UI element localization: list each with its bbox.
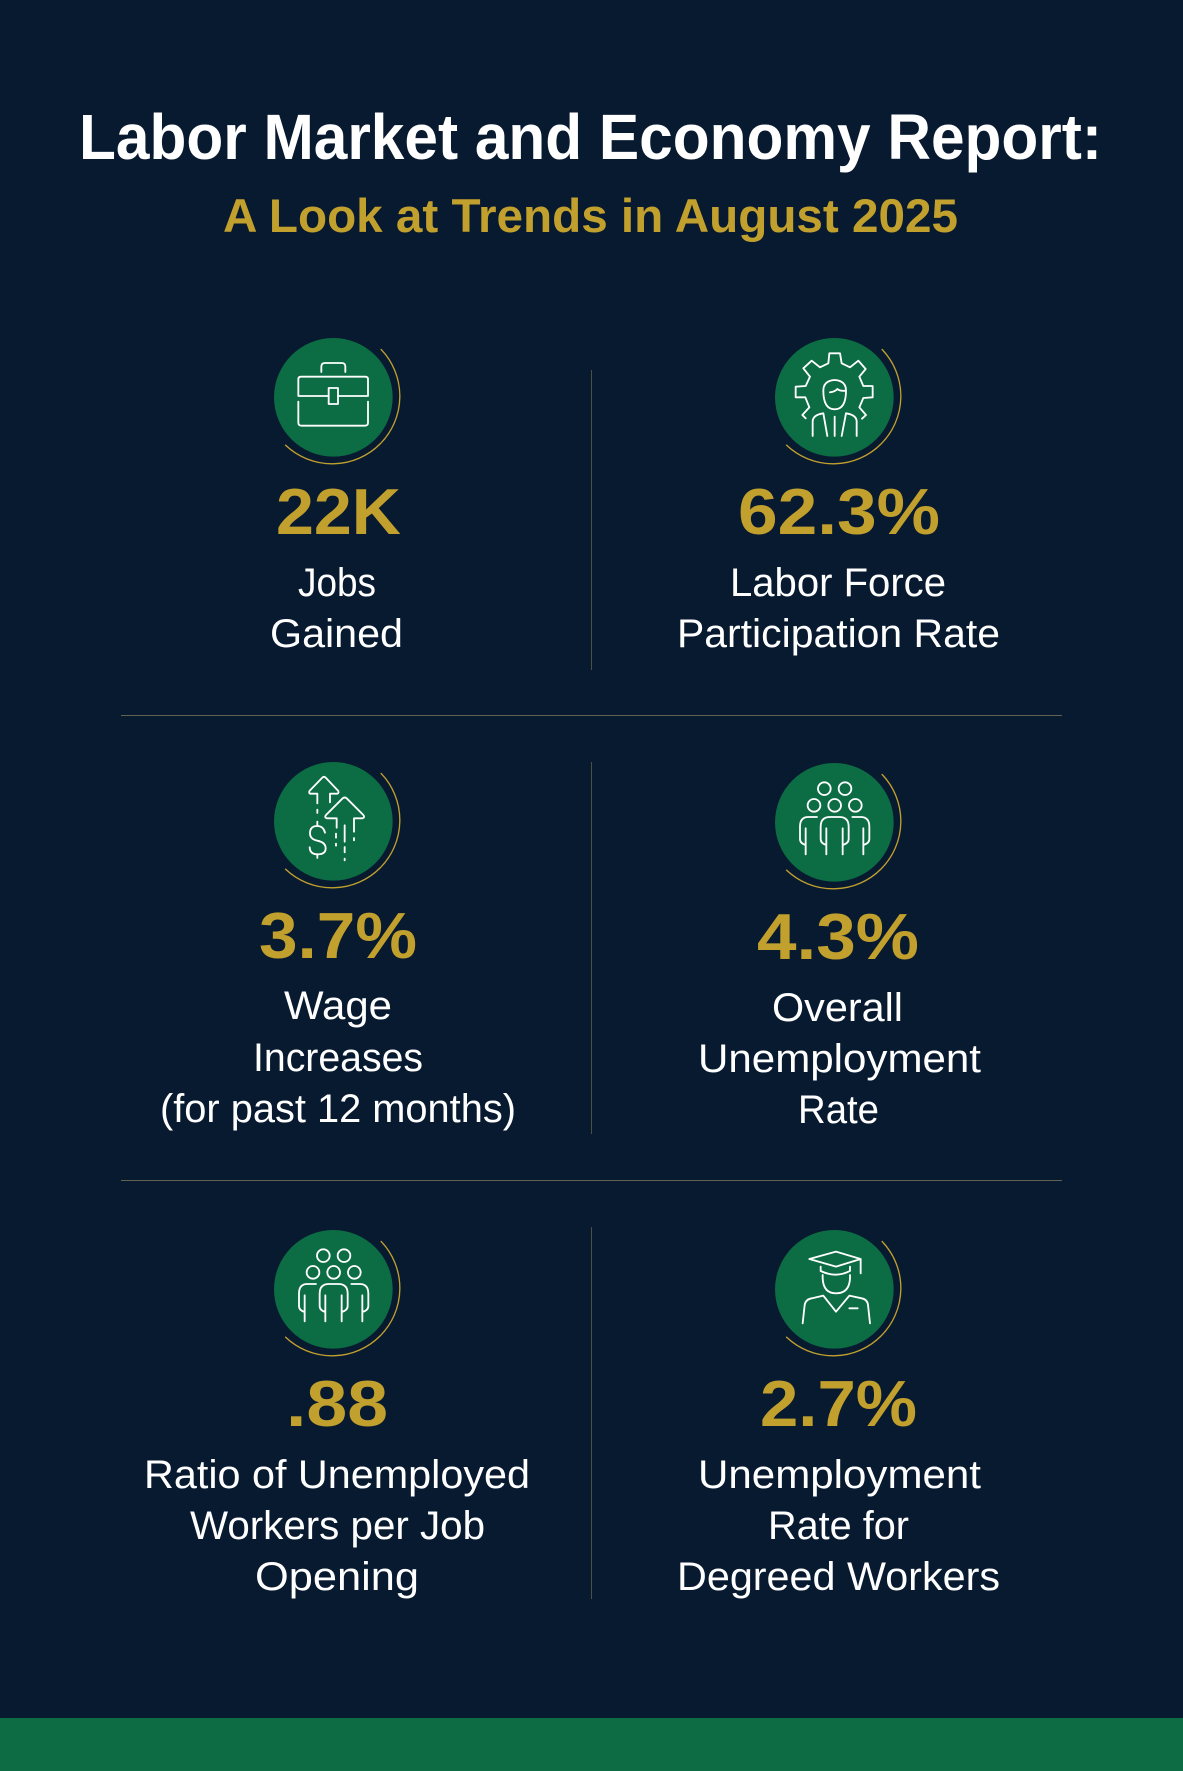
metric value: .88 <box>286 1367 388 1440</box>
title: Labor Market and Economy Report: <box>79 101 1102 173</box>
metric value: 62.3% <box>738 475 940 548</box>
metric value: 4.3% <box>757 900 919 973</box>
panel: overall unemployment rate <box>698 763 981 1132</box>
metric label <box>160 984 516 1131</box>
icon: gear with person <box>775 338 901 464</box>
metric label: Opening <box>255 1555 419 1599</box>
panel: wage increases <box>160 762 516 1131</box>
metric label <box>677 1453 1000 1599</box>
metric label: Ratio of Unemployed <box>144 1453 530 1497</box>
metric label <box>144 1453 530 1599</box>
metric label: Labor Force <box>730 561 946 605</box>
metric label: Rate <box>798 1088 879 1132</box>
icon: briefcase <box>274 338 400 464</box>
metric label <box>698 986 981 1132</box>
metric label: Wage <box>284 984 392 1028</box>
metric value: 22K <box>276 475 401 548</box>
metric label: (for past 12 months) <box>160 1087 516 1131</box>
metric value: 2.7% <box>760 1367 917 1440</box>
metric label <box>270 561 403 656</box>
icon: group of people <box>274 1230 400 1356</box>
metric label <box>677 561 1000 656</box>
metric value: 3.7% <box>259 899 417 972</box>
metric label: Workers per Job <box>190 1504 485 1548</box>
footer band <box>0 1718 1183 1771</box>
metric label: Participation Rate <box>677 612 1000 656</box>
metric label: Overall <box>772 986 903 1030</box>
title block <box>79 101 1102 242</box>
metric label: Increases <box>253 1036 423 1080</box>
panel: labor force participation <box>677 338 1000 656</box>
panel: unemployment rate for degreed workers <box>677 1230 1000 1599</box>
subtitle: A Look at Trends in August 2025 <box>223 189 958 242</box>
icon: graduate <box>775 1230 901 1356</box>
metric label: Gained <box>270 612 403 656</box>
icon: group of people <box>775 763 901 889</box>
metric label: Rate for <box>768 1504 909 1548</box>
metric label: Jobs <box>298 561 376 605</box>
icon: rising arrows with dollar sign <box>274 762 400 888</box>
panel: ratio of unemployed workers per job opening <box>144 1230 530 1599</box>
metric label: Unemployment <box>698 1453 981 1497</box>
panel: jobs gained <box>270 338 403 656</box>
metric label: Unemployment <box>698 1037 981 1081</box>
metric label: Degreed Workers <box>677 1555 1000 1599</box>
